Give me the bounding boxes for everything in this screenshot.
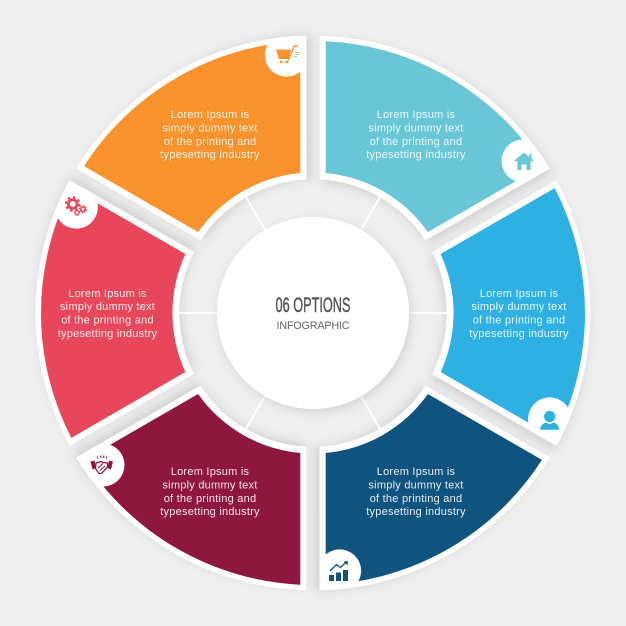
icon: handshake	[90, 456, 113, 474]
icon: person	[540, 411, 559, 430]
text: red segment: of the printing and	[61, 315, 154, 327]
icon: growth chart	[329, 561, 348, 581]
text: red segment: Lorem Ipsum is	[68, 288, 147, 300]
panel: blue segment	[430, 180, 592, 450]
icon: gears	[66, 197, 87, 215]
text: maroon segment: of the printing and	[164, 493, 256, 505]
center circle	[217, 217, 409, 409]
panel: navy segment	[312, 386, 550, 594]
text: red segment: typesetting industry	[58, 328, 158, 340]
panel: orange segment	[76, 32, 314, 240]
text: teal segment: Lorem Ipsum is	[377, 109, 456, 121]
icon: house	[514, 153, 534, 170]
text: orange segment: of the printing and	[164, 136, 256, 148]
hub spokes	[179, 197, 447, 429]
text: maroon segment: Lorem Ipsum is	[171, 466, 250, 478]
text: maroon segment: simply dummy text	[162, 479, 258, 491]
text: blue segment: simply dummy text	[471, 301, 567, 313]
icon: shopping cart	[276, 46, 299, 63]
text: orange segment: Lorem Ipsum is	[171, 109, 250, 121]
text: orange segment: typesetting industry	[160, 149, 260, 161]
text: blue segment: typesetting industry	[469, 328, 569, 340]
text: navy segment: typesetting industry	[366, 506, 466, 518]
text: navy segment: of the printing and	[370, 493, 462, 505]
panel: red segment	[34, 176, 196, 446]
text: maroon segment: typesetting industry	[160, 506, 260, 518]
heading: 06 options: 06 OPTIONS	[276, 293, 350, 317]
text: navy segment: Lorem Ipsum is	[377, 466, 456, 478]
subheading: infographic: INFOGRAPHIC	[276, 320, 350, 332]
text: red segment: simply dummy text	[60, 301, 155, 313]
panel: teal segment	[320, 36, 550, 240]
text: blue segment: of the printing and	[473, 315, 565, 327]
panel: maroon segment	[76, 386, 306, 590]
text: teal segment: simply dummy text	[368, 122, 464, 134]
text: navy segment: simply dummy text	[368, 479, 464, 491]
text: blue segment: Lorem Ipsum is	[480, 288, 559, 300]
text: teal segment: of the printing and	[370, 136, 462, 148]
text: orange segment: simply dummy text	[162, 122, 258, 134]
text: teal segment: typesetting industry	[366, 149, 466, 161]
